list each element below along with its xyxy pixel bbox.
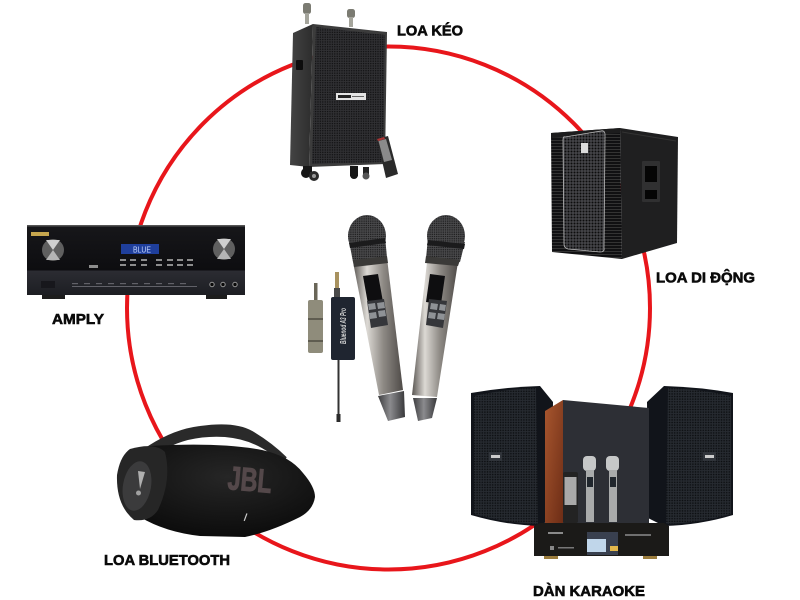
product: amplifier bbox=[27, 225, 245, 299]
subwoofer front bbox=[563, 400, 649, 523]
brand badge bbox=[336, 93, 366, 100]
adapter plug bbox=[308, 283, 323, 353]
label: Amply: AMPLY bbox=[52, 311, 104, 328]
knob right bbox=[213, 238, 235, 260]
side top trim bbox=[622, 132, 676, 141]
lower panel buttons bbox=[41, 281, 197, 288]
cabinet right side bbox=[620, 128, 678, 259]
end cap bbox=[117, 446, 167, 520]
side handle bbox=[642, 161, 660, 202]
label: Dàn karaoke: DÀN KARAOKE bbox=[533, 583, 645, 600]
left speaker bbox=[471, 386, 553, 526]
feet bbox=[42, 295, 65, 299]
microphone right bbox=[412, 215, 465, 421]
product: karaoke system bbox=[471, 386, 733, 559]
wireless receiver bbox=[331, 272, 355, 422]
chassis bbox=[27, 225, 245, 295]
product: wireless microphones set bbox=[308, 215, 465, 422]
product: JBL bluetooth speaker bbox=[117, 425, 315, 537]
right speaker bbox=[647, 386, 733, 526]
cabinet front mesh bbox=[309, 24, 387, 167]
badge bbox=[581, 143, 588, 153]
subwoofer wood side bbox=[545, 400, 563, 523]
grille bbox=[563, 131, 605, 252]
icon: remote control bbox=[377, 136, 398, 178]
microphone left bbox=[348, 215, 405, 421]
wireless microphones bbox=[583, 456, 619, 522]
knob left bbox=[42, 239, 64, 261]
body tick bbox=[244, 513, 247, 521]
display: BLUE bbox=[133, 246, 151, 254]
JBL logo: JBL bbox=[226, 459, 273, 500]
display bbox=[121, 244, 159, 254]
product: mobile subwoofer (loa di động) bbox=[551, 128, 678, 259]
front controls bbox=[89, 259, 193, 268]
label: Loa di động: LOA DI ĐỘNG bbox=[656, 268, 755, 286]
carrying handle bbox=[150, 425, 286, 458]
karaoke amplifier bbox=[534, 523, 669, 559]
jacks bbox=[210, 282, 237, 287]
cabinet front bbox=[551, 128, 622, 259]
remote control bbox=[563, 472, 578, 523]
label: Loa Bluetooth: LOA BLUETOOTH bbox=[104, 552, 230, 569]
wireless receiver: Bluenod A3 Pro bbox=[338, 308, 348, 344]
wheels bbox=[301, 166, 370, 181]
cabinet side bbox=[290, 24, 313, 167]
red connecting circle bbox=[127, 46, 650, 570]
logo bbox=[31, 232, 49, 236]
body bbox=[120, 445, 315, 537]
icon: microphones on top of trolley speaker bbox=[303, 3, 355, 27]
label: Loa kéo: LOA KÉO bbox=[397, 22, 463, 40]
product: trolley speaker (loa kéo) bbox=[290, 3, 398, 181]
handle recess bbox=[296, 60, 303, 70]
